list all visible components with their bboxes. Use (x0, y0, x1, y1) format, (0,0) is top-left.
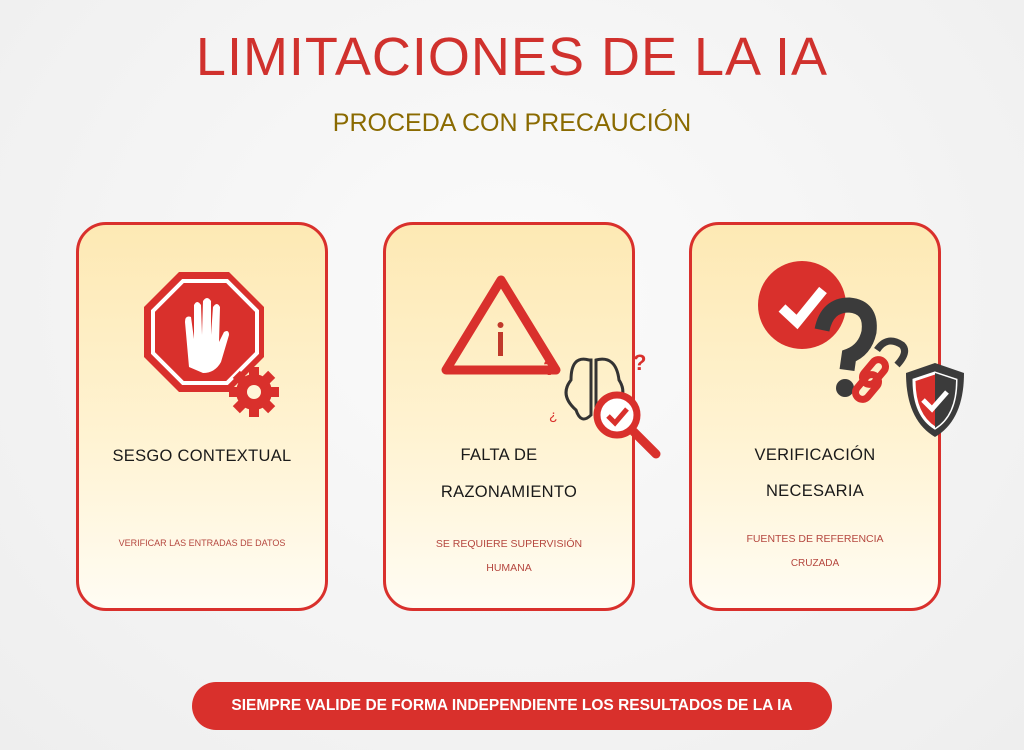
subtext: CRUZADA (791, 558, 839, 569)
panel: verificación necesaria (689, 222, 941, 611)
subtext: SE REQUIERE SUPERVISIÓN (436, 538, 582, 550)
icon: warning triangle with brain and magnifier: ¿ (549, 407, 558, 423)
heading: FALTA DE (460, 446, 537, 464)
icon: check, question, chain, shield (758, 261, 964, 437)
subtitle: PROCEDA CON PRECAUCIÓN (333, 109, 691, 137)
icon: warning triangle with brain and magnifier: ? (543, 355, 556, 380)
heading: VERIFICACIÓN (755, 446, 875, 464)
icon: stop hand with gear (144, 272, 279, 417)
banner: SIEMPRE VALIDE DE FORMA INDEPENDIENTE LOS RESULTADOS DE LA IA (231, 697, 793, 714)
heading: SESGO CONTEXTUAL (112, 447, 292, 465)
subtext: HUMANA (486, 562, 532, 574)
heading line 2: NECESARIA (766, 482, 864, 500)
subtext: VERIFICAR LAS ENTRADAS DE DATOS (119, 538, 285, 548)
panel: falta de razonamiento (383, 222, 635, 611)
subtext: FUENTES DE REFERENCIA (746, 533, 884, 545)
icon: warning triangle with brain and magnifier: ? (633, 350, 646, 375)
banner (192, 682, 832, 730)
title: LIMITACIONES DE LA IA (196, 27, 828, 87)
subtext (436, 538, 582, 574)
subtext (746, 533, 884, 569)
panel: sesgo contextual (76, 222, 328, 611)
heading line 2: RAZONAMIENTO (441, 483, 577, 501)
icon: warning triangle with brain and magnifier (442, 276, 660, 458)
